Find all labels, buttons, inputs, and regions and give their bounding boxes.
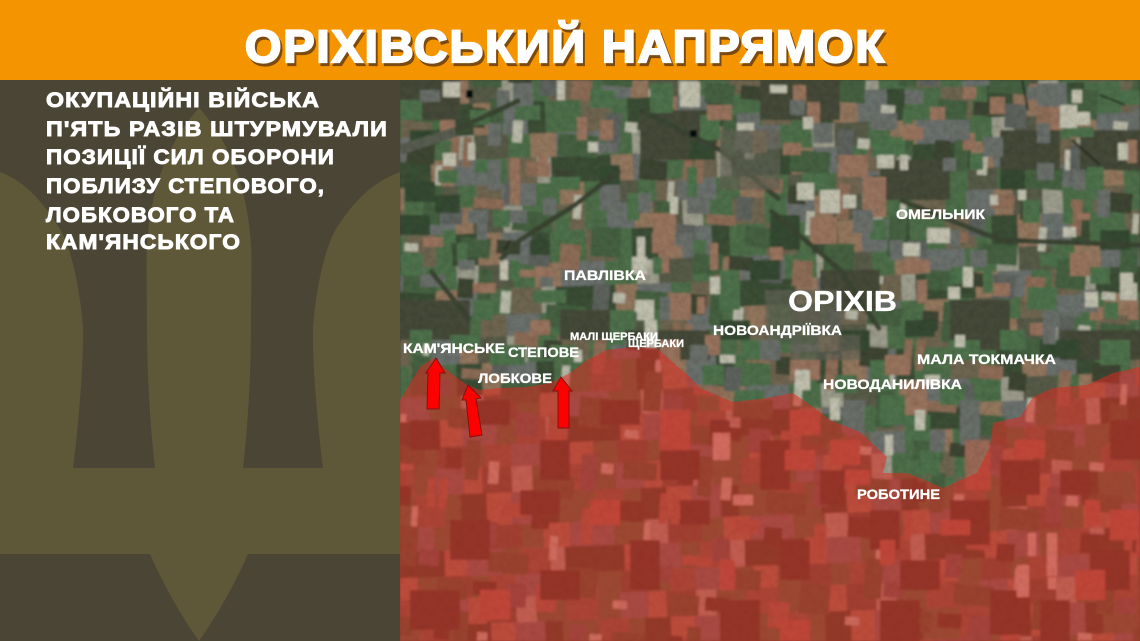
label: Omelnyk: ОМЕЛЬНИК: [896, 206, 985, 222]
bright green fields: [400, 83, 1140, 475]
label: Kamianske: КАМ'ЯНСЬКЕ: [403, 340, 505, 356]
text block: summary: ОКУПАЦІЙНІ ВІЙСЬКА: [46, 88, 320, 112]
text block: summary: [46, 88, 388, 254]
lower farmland, tinted by the occupied-area overlay: [410, 400, 1140, 641]
label: Robotyne: РОБОТИНЕ: [857, 486, 940, 502]
text block: summary: КАМ'ЯНСЬКОГО: [46, 231, 241, 254]
label: Orikhiv: ОРІХІВ: [788, 286, 897, 318]
arrow: attack on Kamianske: [426, 358, 445, 409]
dark green fields: [400, 130, 1130, 358]
panel: satellite map: [400, 80, 1140, 641]
text block: summary: П'ЯТЬ РАЗІВ ШТУРМУВАЛИ: [46, 118, 388, 141]
arrow: attack on Stepove: [553, 377, 572, 428]
text block: summary: ЛОБКОВОГО ТА: [46, 204, 235, 227]
text block: summary: ПОБЛИЗУ СТЕПОВОГО,: [46, 175, 325, 198]
map texture: [400, 80, 1140, 576]
river and roads: [400, 132, 455, 150]
label: Novodanylivka: НОВОДАНИЛІВКА: [823, 376, 962, 392]
map labels: [403, 206, 1056, 502]
label: Shcherbaky: ЩЕРБАКИ: [628, 338, 684, 350]
icon: trident emblem watermark: [0, 108, 400, 641]
pale fields: [443, 80, 1137, 455]
header band: [0, 0, 1140, 80]
label: Stepove: СТЕПОВЕ: [508, 344, 579, 360]
label: Lobkove: ЛОБКОВЕ: [478, 370, 552, 386]
title: ОРІХІВСЬКИЙ НАПРЯМОК: [245, 21, 886, 72]
label: Novoandriivka: НОВОАНДРІЇВКА: [713, 322, 842, 338]
gray fields: [420, 83, 1140, 452]
label: Mali Shcherbaky: МАЛІ ЩЕРБАКИ: [570, 331, 658, 343]
label: Mala Tokmachka: МАЛА ТОКМАЧКА: [917, 351, 1056, 367]
orange and brown fields: [423, 85, 1138, 415]
olive and dark farmland: [400, 80, 1140, 360]
title: ОРІХІВСЬКИЙ НАПРЯМОК: [247, 24, 888, 75]
label: Pavlivka: ПАВЛІВКА: [564, 267, 646, 283]
town grey-brown sprawl: [720, 130, 860, 360]
panel: left olive background: [0, 80, 400, 641]
text block: summary: ПОЗИЦІЇ СИЛ ОБОРОНИ: [46, 146, 335, 169]
arrow: attack on Lobkove: [462, 385, 482, 437]
occupied territory overlay: [400, 347, 1140, 641]
